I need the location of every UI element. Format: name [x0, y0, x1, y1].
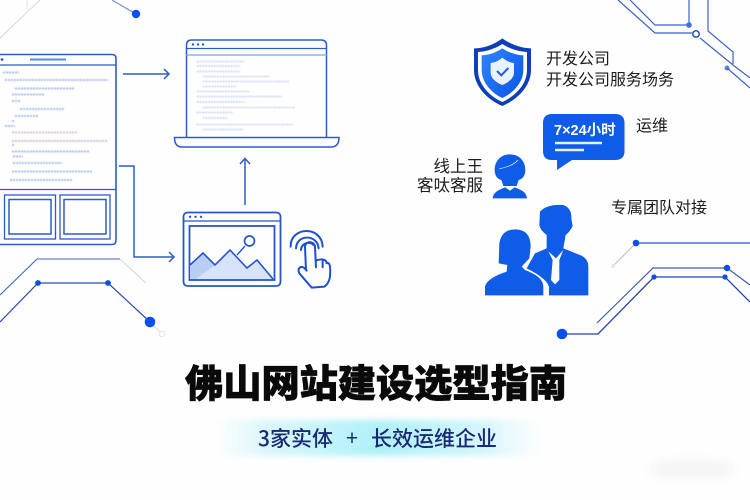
circuit lines: top right [618, 0, 750, 88]
icon: team people [485, 205, 588, 295]
panel: image browser window [184, 212, 280, 286]
circuit lines: lower right [557, 240, 750, 339]
arrow: image window to laptop [240, 158, 250, 205]
icon: shield [474, 38, 531, 106]
icon: 7x24 chat bubble: 7×24小时 [554, 122, 616, 139]
panel: code browser window [0, 54, 116, 244]
subtitle banner: 3家实体 [258, 423, 333, 453]
mountain picture [190, 236, 273, 279]
thumbnail 1 [4, 195, 56, 239]
icon: customer service agent [493, 154, 527, 198]
title: 佛山网站建设选型指南 [185, 354, 567, 409]
text: online customer service: 线上王 [434, 157, 483, 176]
text: development company: 开发公司 [546, 50, 610, 68]
background smudge [648, 461, 736, 477]
arrow: code window to image window [119, 166, 174, 262]
text: dedicated team: 专属团队对接 [611, 199, 707, 217]
subtitle banner: + [346, 427, 358, 450]
panel: laptop [174, 40, 339, 147]
woman [485, 229, 543, 295]
subtitle banner: 长效运维企业 [371, 423, 497, 453]
circuit lines: top left [0, 0, 140, 38]
icon: tapping hand [291, 231, 330, 288]
text: online customer service [417, 157, 483, 195]
code lines [3, 72, 108, 180]
text: development company [546, 50, 674, 89]
text: online customer service: 客呔客服 [417, 176, 483, 195]
arrow: code window to laptop [123, 69, 169, 79]
text: development company: 开发公司服务场务 [546, 71, 674, 89]
text: operations: 运维 [636, 117, 668, 135]
thumbnail 2 [60, 195, 110, 239]
laptop code lines [197, 62, 295, 130]
circuit lines: lower left [0, 259, 165, 337]
subtitle banner [212, 420, 548, 456]
man [527, 205, 588, 295]
icon: 7x24 chat bubble [543, 114, 624, 170]
